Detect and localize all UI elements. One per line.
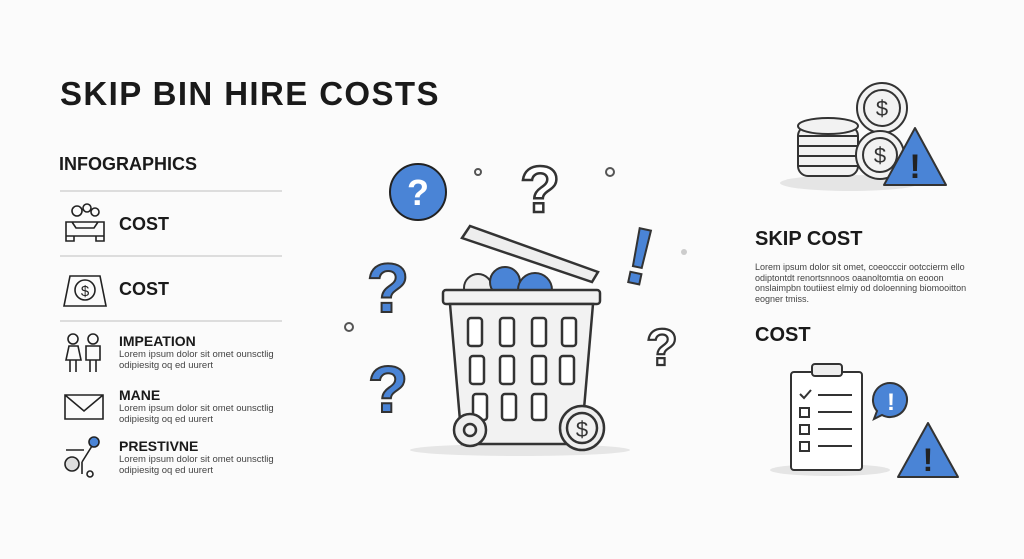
icon: dollar: $ xyxy=(81,283,90,300)
icon: coins with warning: ! xyxy=(909,148,921,186)
item: impeation: IMPEATION xyxy=(119,333,196,349)
text: Lorem ipsum dolor sit omet ounsctlig xyxy=(119,349,274,360)
item: prestivne xyxy=(64,436,274,478)
label: COST xyxy=(119,279,169,299)
central illustration: trash bin with question marks: ? xyxy=(368,352,408,426)
icon: network xyxy=(64,436,100,478)
text: skip cost: Lorem ipsum dolor sit omet, coeocccir ootccierm ello odiptontdt renortsnnoos oaanoltomtia on eooon onslaimpbn toutiiest elmiy od doloenning biomooitton eogner tmiss. xyxy=(755,262,966,304)
bin body xyxy=(443,290,604,450)
question marks xyxy=(390,164,446,220)
item: mane xyxy=(64,387,274,425)
bin contents xyxy=(464,267,552,307)
central illustration: trash bin with question marks: ? xyxy=(520,152,560,226)
item: cost 1 xyxy=(65,203,169,242)
text: odipiesitg oq ed uurert xyxy=(119,465,213,476)
label: COST xyxy=(119,214,169,234)
icon: dollar xyxy=(63,275,107,307)
item: mane: MANE xyxy=(119,387,160,403)
icon: clipboard with warning: ! xyxy=(887,389,895,416)
item: cost 2 xyxy=(63,275,169,307)
text xyxy=(119,349,274,371)
icon: envelope xyxy=(64,394,104,420)
question marks: ? xyxy=(407,172,429,213)
item: impeation xyxy=(65,333,274,372)
icon: car xyxy=(65,203,105,242)
text xyxy=(119,454,274,476)
subheading: INFOGRAPHICS xyxy=(59,154,197,174)
central illustration: trash bin with question marks: ! xyxy=(617,210,662,303)
text: odipiesitg oq ed uurert xyxy=(119,414,213,425)
icon: coins with warning: $ xyxy=(874,143,886,168)
icon: clipboard with warning: ! xyxy=(923,442,933,478)
central illustration: trash bin with question marks xyxy=(344,152,687,456)
coin xyxy=(560,406,604,450)
text: odipiesitg oq ed uurert xyxy=(119,360,213,371)
bin lid xyxy=(462,226,598,282)
central illustration: trash bin with question marks: ? xyxy=(367,249,409,327)
text: Lorem ipsum dolor sit omet ounsctlig xyxy=(119,403,274,414)
icon: people xyxy=(65,333,101,372)
text xyxy=(119,403,274,425)
heading: skip cost: SKIP COST xyxy=(755,228,862,250)
item: prestivne: PRESTIVNE xyxy=(119,438,198,454)
central illustration: trash bin with question marks: $ xyxy=(576,417,588,442)
heading: cost: COST xyxy=(755,324,811,346)
central illustration: trash bin with question marks: ? xyxy=(646,319,678,377)
text: Lorem ipsum dolor sit omet ounsctlig xyxy=(119,454,274,465)
icon: clipboard with warning xyxy=(770,363,959,478)
icon: coins with warning xyxy=(780,82,947,191)
title: SKIP BIN HIRE COSTS xyxy=(60,75,440,112)
icon: coins with warning: $ xyxy=(876,96,888,121)
wheel xyxy=(454,414,486,446)
